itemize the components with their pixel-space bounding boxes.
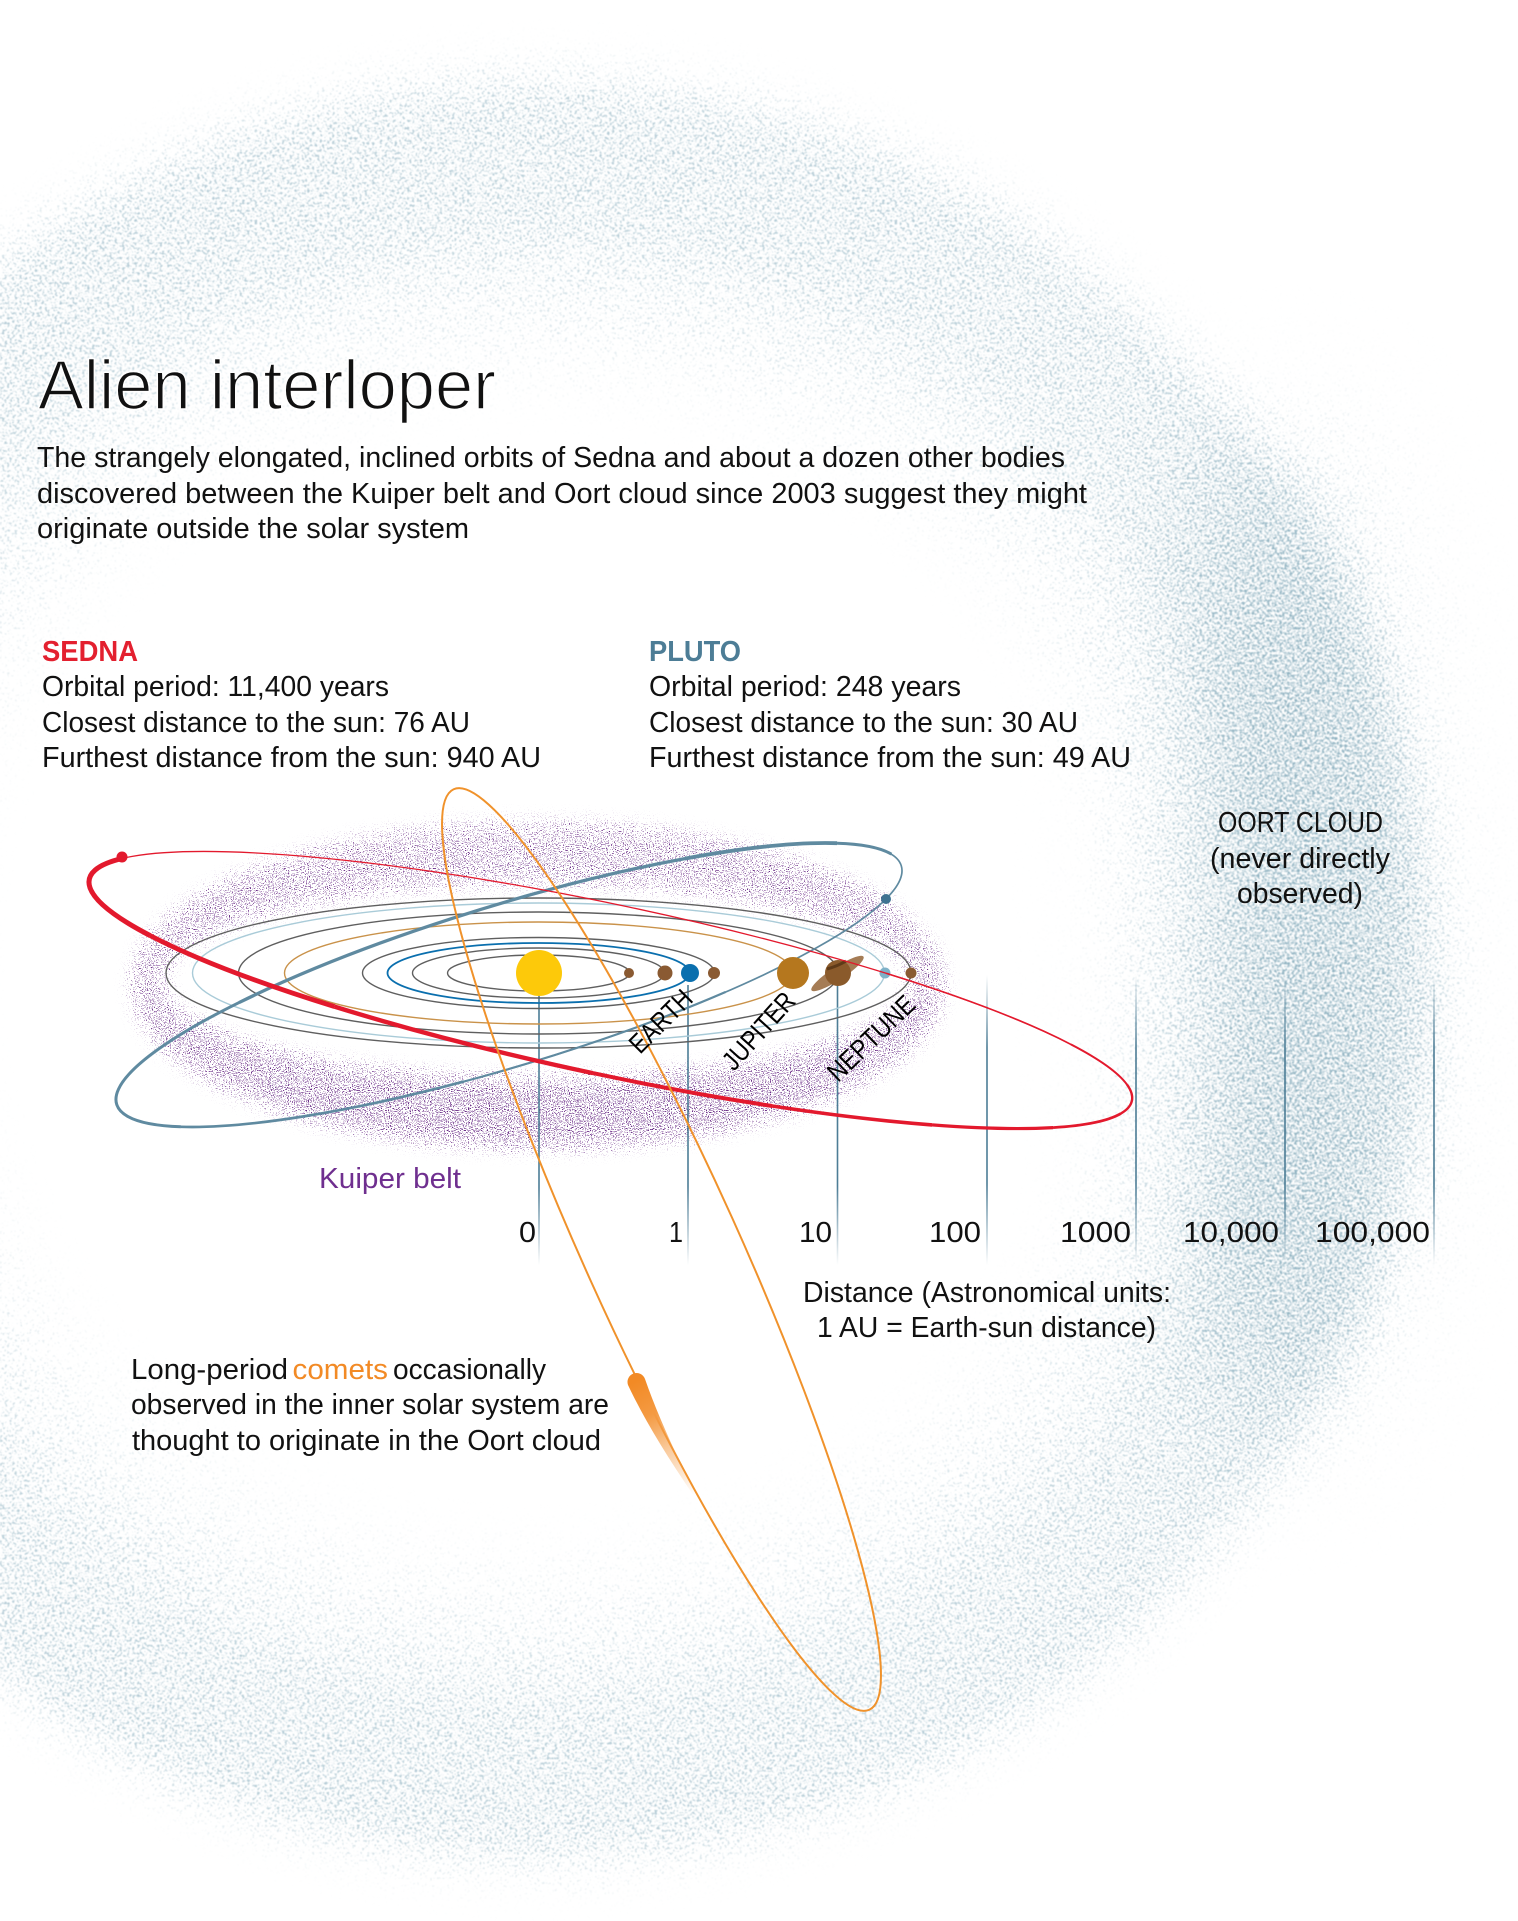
- planet labels: EARTH: [623, 984, 699, 1059]
- title: Alien interloper: [38, 346, 496, 424]
- axis labels: 10: [799, 1217, 832, 1249]
- Pluto orbit: [93, 789, 925, 1181]
- distance axis ticks: [538, 975, 1435, 1265]
- comet note: [131, 1354, 609, 1457]
- Pluto facts: PLUTO: [649, 636, 741, 668]
- planet labels: NEPTUNE: [821, 989, 921, 1087]
- Sedna facts: Furthest distance from the sun: 940 AU: [42, 742, 541, 774]
- intro text: discovered between the Kuiper belt and Oort cloud since 2003 suggest they might: [37, 478, 1087, 510]
- Pluto facts: Orbital period: 248 years: [649, 671, 961, 703]
- Kuiper belt label: Kuiper belt: [319, 1163, 461, 1195]
- planetary orbits: [166, 898, 911, 1048]
- Kuiper belt: [133, 823, 943, 1147]
- comet note: comets: [292, 1354, 388, 1386]
- intro text: originate outside the solar system: [37, 513, 469, 545]
- axis labels: 100: [929, 1217, 981, 1249]
- Earth: [681, 964, 699, 982]
- Pluto facts: Closest distance to the sun: 30 AU: [649, 707, 1078, 739]
- sun: [516, 950, 562, 996]
- Sedna facts: Orbital period: 11,400 years: [42, 671, 389, 703]
- axis labels: 0: [519, 1217, 536, 1249]
- axis labels: 10,000: [1183, 1217, 1279, 1249]
- Uranus: [880, 968, 890, 978]
- axis title: Distance (Astronomical units:: [803, 1277, 1171, 1309]
- comet: [627, 1373, 697, 1496]
- Oort cloud label: observed): [1237, 878, 1363, 910]
- Oort cloud label: (never directly: [1210, 843, 1390, 875]
- Pluto facts: Furthest distance from the sun: 49 AU: [649, 742, 1131, 774]
- axis labels: [519, 1217, 1430, 1249]
- comet note: occasionally: [393, 1354, 546, 1386]
- Oort cloud label: OORT CLOUD: [1218, 807, 1383, 839]
- Neptune: [906, 968, 916, 978]
- intro text: The strangely elongated, inclined orbits of Sedna and about a dozen other bodies: [37, 442, 1065, 474]
- Sedna orbit: [71, 796, 1150, 1184]
- axis title: [803, 1277, 1171, 1344]
- axis labels: 1000: [1060, 1217, 1131, 1249]
- comet note: observed in the inner solar system are: [131, 1389, 609, 1421]
- Pluto marker: [881, 894, 891, 904]
- intro text: [37, 442, 1087, 545]
- Sedna facts: SEDNA: [42, 636, 138, 668]
- comet note: Long-period: [131, 1354, 288, 1386]
- Saturn: [808, 951, 867, 996]
- planet labels: [623, 984, 921, 1087]
- planets and sun: [516, 950, 916, 996]
- Sedna facts: Closest distance to the sun: 76 AU: [42, 707, 470, 739]
- Jupiter: [777, 957, 809, 989]
- Sedna marker: [116, 852, 128, 862]
- axis labels: 100,000: [1315, 1217, 1430, 1249]
- comet note: thought to originate in the Oort cloud: [132, 1425, 601, 1457]
- Mercury: [624, 968, 634, 978]
- axis labels: 1: [669, 1217, 683, 1249]
- Venus: [658, 966, 672, 980]
- Mars: [708, 967, 720, 979]
- Oort cloud label: [1210, 807, 1390, 910]
- Sedna facts: [42, 636, 541, 774]
- Pluto facts: [649, 636, 1131, 774]
- planet labels: JUPITER: [716, 986, 801, 1076]
- axis title: 1 AU = Earth-sun distance): [817, 1312, 1156, 1344]
- comet orbit: [383, 757, 940, 1742]
